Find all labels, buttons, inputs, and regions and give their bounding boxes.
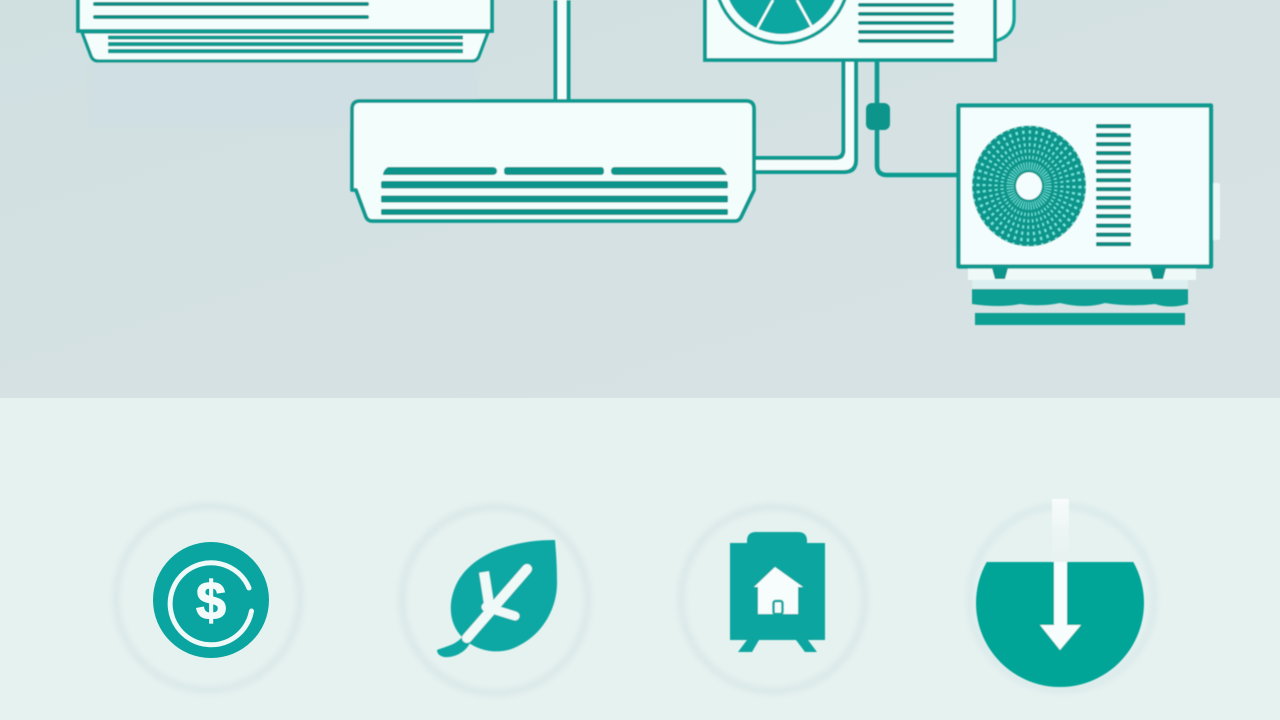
benefit icons row [116, 499, 1154, 693]
fan grille [972, 126, 1086, 246]
icon: dollar coin: $ [196, 571, 226, 631]
outdoor unit: right [958, 106, 1220, 325]
benefit: home unit [681, 507, 865, 691]
feet [992, 268, 1008, 279]
upper background panel [0, 0, 1280, 398]
refrigerant pipes: from outdoor unit to middle indoor unit [755, 60, 856, 172]
benefit: lower consumption [970, 499, 1154, 690]
cabinet [958, 106, 1211, 266]
icon: appliance with house [730, 532, 825, 652]
wavy base bar [972, 289, 1188, 306]
indoor unit: top left [78, 0, 492, 61]
icon: leaf [437, 540, 557, 657]
indoor unit: middle [352, 101, 754, 221]
refrigerant line with connector [866, 60, 958, 175]
side bump [995, 0, 1014, 41]
icon: half disc with down arrow [976, 499, 1144, 687]
outdoor unit: top centre [705, 0, 1014, 60]
air conditioning illustration [78, 0, 1220, 325]
louvres [858, 3, 954, 43]
flat base bar [975, 313, 1185, 325]
benefit: savings [116, 506, 300, 690]
icon: dollar coin [153, 542, 269, 658]
cabinet [705, 0, 995, 60]
refrigerant pipe: to middle indoor unit [554, 0, 570, 102]
side tab [1212, 183, 1220, 240]
louvres [1096, 124, 1131, 246]
shadow below top-left indoor unit [92, 63, 475, 126]
benefit: eco friendly [402, 507, 588, 693]
fan [715, 0, 849, 43]
mounting plate highlight [968, 268, 1196, 280]
lower background panel [0, 398, 1280, 720]
